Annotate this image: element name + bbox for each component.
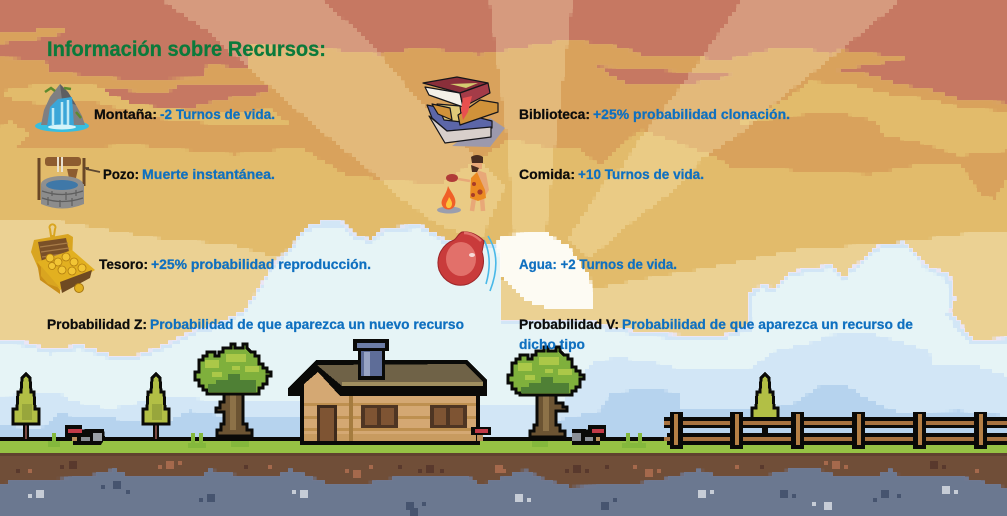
text: Comida	[519, 166, 704, 182]
icon: treasure chest	[31, 224, 95, 294]
cypress tree behind fence	[752, 374, 778, 441]
icon: mountain with waterfall	[35, 84, 89, 132]
house roof	[288, 360, 487, 396]
text: Comida: +10 Turnos de vida.	[578, 166, 704, 182]
text: Comida: Comida:	[519, 166, 575, 182]
title: Información sobre Recursos:	[47, 38, 326, 61]
cypress tree middle	[143, 374, 169, 441]
grass tufts	[48, 433, 646, 448]
house	[288, 339, 487, 445]
text: Probabilidad V: Probabilidad de que aparezca un recurso de	[622, 316, 913, 332]
icon: well	[39, 157, 100, 208]
icon: caveman with meat over fire	[437, 155, 489, 214]
text: Montaña: Montaña:	[94, 106, 157, 122]
icon: stack of books	[423, 77, 505, 147]
text: Probabilidad V	[519, 316, 913, 352]
text: Probabilidad Z: Probabilidad de que aparezca un nuevo recurso	[150, 316, 464, 332]
rock and mushroom left	[65, 425, 105, 445]
text: Pozo: Muerte instantánea.	[142, 166, 275, 182]
text: Tesoro: Tesoro:	[99, 256, 148, 272]
cypress tree left	[13, 374, 39, 441]
text: Biblioteca: +25% probabilidad clonación.	[593, 106, 790, 122]
text: Agua: Agua: +2 Turnos de vida.	[519, 256, 677, 272]
ground: grass, soil and stone	[0, 437, 1007, 516]
house wall	[300, 395, 480, 445]
text: Pozo: Pozo:	[103, 166, 139, 182]
text: Probabilidad V: dicho tipo	[519, 336, 585, 352]
text: Probabilidad Z: Probabilidad Z:	[47, 316, 147, 332]
oak tree right	[508, 347, 584, 437]
house chimney	[353, 339, 389, 380]
icon: clay water jug	[438, 232, 496, 291]
text: Tesoro: +25% probabilidad reproducción.	[151, 256, 371, 272]
house window left	[361, 405, 398, 428]
rock and mushroom right	[572, 425, 606, 445]
house window right	[430, 405, 467, 428]
text: Montaña	[94, 106, 275, 122]
oak tree left	[195, 344, 271, 436]
text: Montaña: -2 Turnos de vida.	[160, 106, 275, 122]
wooden fence	[664, 412, 1007, 449]
house door	[317, 405, 337, 441]
mushroom beside house	[471, 427, 491, 441]
text: Biblioteca: Biblioteca:	[519, 106, 590, 122]
text: Probabilidad V: Probabilidad V:	[519, 316, 619, 332]
